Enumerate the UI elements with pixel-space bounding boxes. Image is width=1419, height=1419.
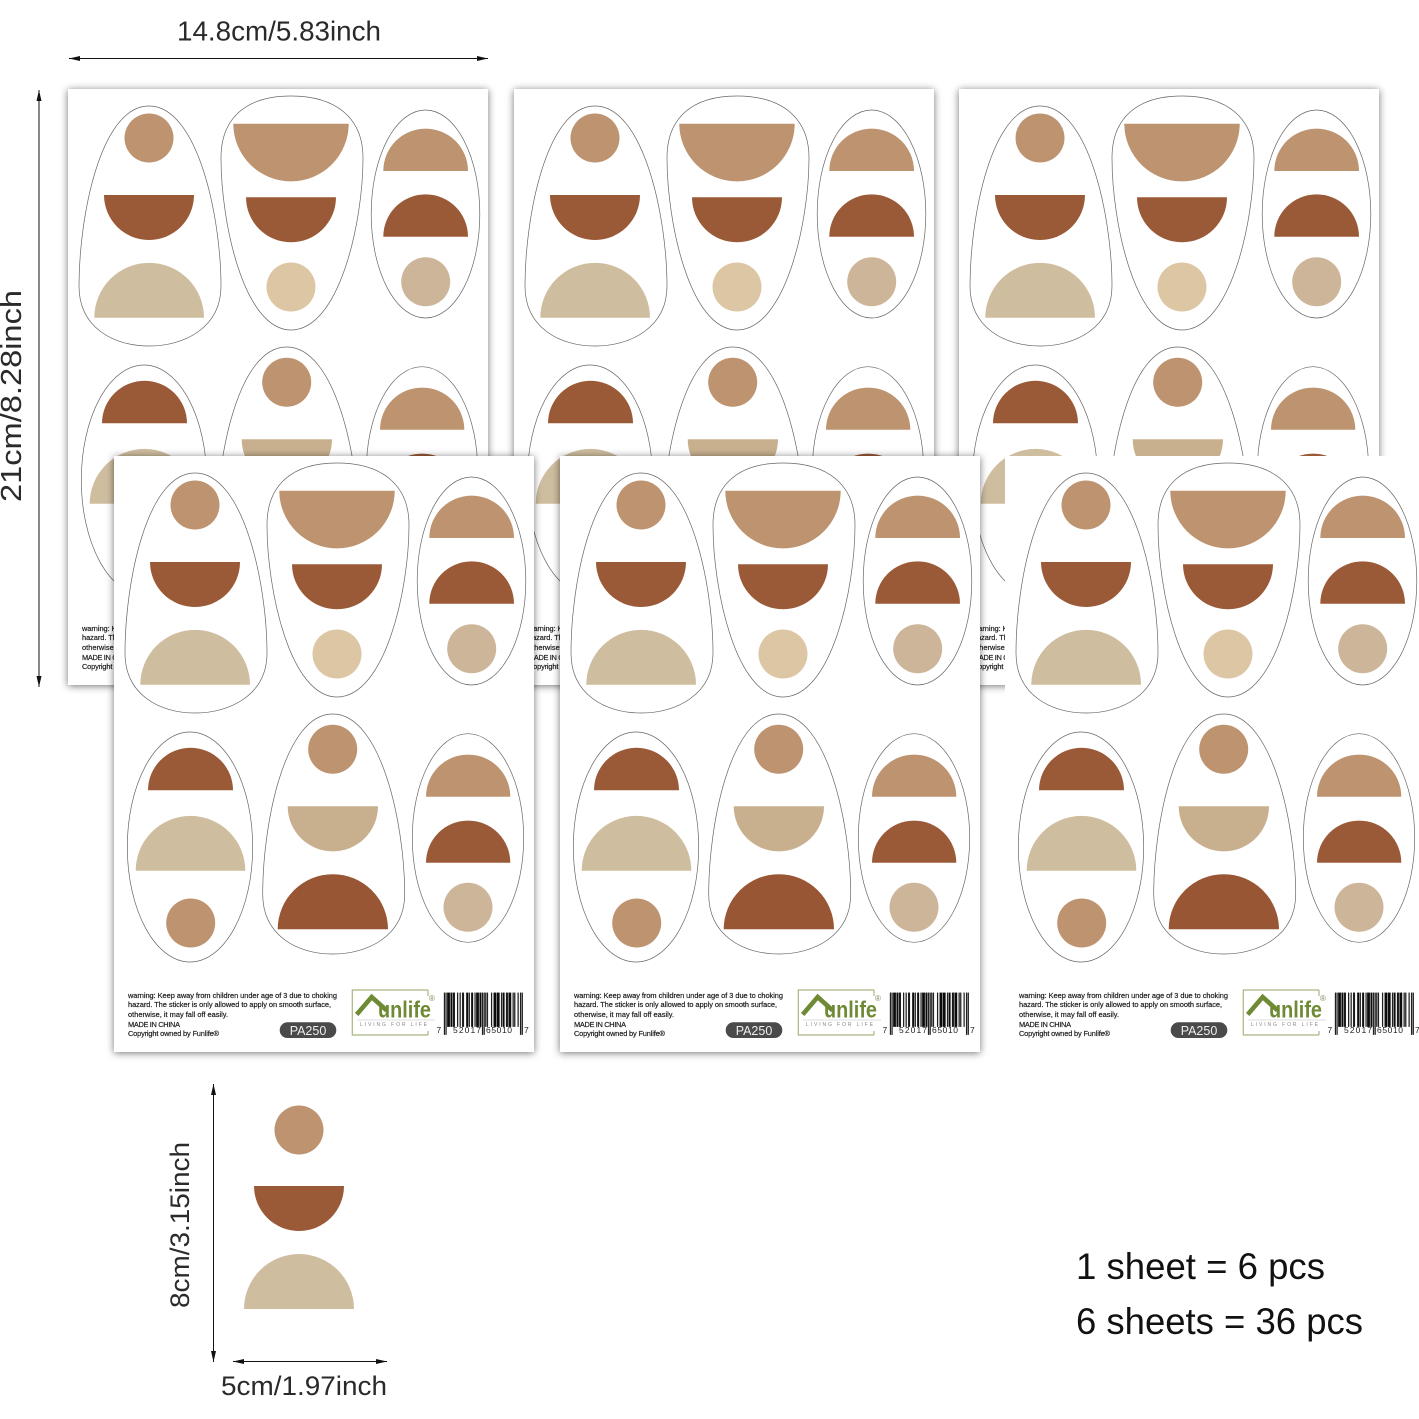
logo: Funlife: ®	[1320, 994, 1326, 1003]
product code pill	[280, 1022, 336, 1038]
logo: Funlife: LIVING FOR LIFE	[360, 1022, 428, 1028]
warning text: MADE IN CHINA	[973, 653, 1025, 662]
sheet: back row left	[68, 89, 488, 685]
arrow: sticker width	[233, 1360, 387, 1362]
warning text: MADE IN CHINA	[128, 1020, 180, 1029]
logo: Funlife	[1243, 990, 1326, 1035]
warning text: otherwise, it may fall off easily.	[574, 1010, 674, 1019]
warning text: MADE IN CHINA	[528, 653, 580, 662]
warning text	[127, 991, 337, 1038]
label: sticker height: 8cm/3.15inch	[165, 1142, 195, 1308]
warning text: otherwise, it may fall off easily.	[1019, 1010, 1119, 1019]
warning text: otherwise, it may fall off easily.	[82, 643, 182, 652]
sheet: front row right	[1005, 456, 1419, 1052]
warning text	[81, 624, 291, 671]
barcode: 7	[524, 1025, 529, 1035]
warning text: Copyright owned by Funlife®	[528, 662, 620, 671]
quantity note	[1076, 1246, 1363, 1342]
warning text: warning: Keep away from children under age of 3 due to choking	[81, 624, 291, 633]
warning text: hazard. The sticker is only allowed to apply on smooth surface,	[528, 633, 731, 642]
barcode: 65010	[486, 1025, 512, 1035]
sheet: front row middle	[560, 456, 980, 1052]
quantity note: 6 sheets = 36 pcs	[1076, 1301, 1363, 1342]
barcode	[1328, 993, 1419, 1035]
warning text: hazard. The sticker is only allowed to apply on smooth surface,	[574, 1000, 777, 1009]
warning text: Copyright owned by Funlife®	[1019, 1029, 1111, 1038]
warning text: hazard. The sticker is only allowed to apply on smooth surface,	[973, 633, 1176, 642]
warning text: otherwise, it may fall off easily.	[528, 643, 628, 652]
product code pill: PA250	[1181, 1024, 1217, 1038]
warning text: MADE IN CHINA	[1019, 1020, 1071, 1029]
sticker: half circle dome	[244, 1254, 354, 1309]
logo: Funlife: unlife	[824, 997, 877, 1023]
warning text: Copyright owned by Funlife®	[973, 662, 1065, 671]
warning text: otherwise, it may fall off easily.	[128, 1010, 228, 1019]
product code pill: PA250	[736, 1024, 772, 1038]
barcode	[882, 993, 975, 1035]
warning text	[573, 991, 783, 1038]
warning text	[972, 624, 1182, 671]
warning text: hazard. The sticker is only allowed to apply on smooth surface,	[1019, 1000, 1222, 1009]
logo: Funlife: ®	[875, 994, 881, 1003]
warning text: warning: Keep away from children under age of 3 due to choking	[527, 624, 737, 633]
logo: Funlife: ®	[429, 994, 435, 1003]
warning text	[1018, 991, 1228, 1038]
warning text: Copyright owned by Funlife®	[574, 1029, 666, 1038]
warning text: otherwise, it may fall off easily.	[973, 643, 1073, 652]
barcode: 52017	[899, 1025, 927, 1035]
barcode: 65010	[932, 1025, 958, 1035]
product code pill	[1171, 1022, 1227, 1038]
warning text: warning: Keep away from children under age of 3 due to choking	[972, 624, 1182, 633]
product code pill	[726, 1022, 782, 1038]
barcode: 7	[1328, 1025, 1332, 1035]
product code pill: PA250	[290, 1024, 326, 1038]
logo: Funlife: unlife	[378, 997, 431, 1023]
warning text: hazard. The sticker is only allowed to apply on smooth surface,	[82, 633, 285, 642]
logo: Funlife: unlife	[1269, 997, 1322, 1023]
single sticker set	[244, 1106, 354, 1309]
warning text: hazard. The sticker is only allowed to apply on smooth surface,	[128, 1000, 331, 1009]
barcode	[436, 993, 529, 1035]
sheet: front row left	[114, 456, 534, 1052]
logo: Funlife	[798, 990, 881, 1035]
warning text: Copyright owned by Funlife®	[82, 662, 174, 671]
warning text: warning: Keep away from children under age of 3 due to choking	[127, 991, 337, 1000]
warning text: warning: Keep away from children under age of 3 due to choking	[573, 991, 783, 1000]
barcode: 7	[436, 1025, 442, 1035]
quantity note: 1 sheet = 6 pcs	[1076, 1246, 1325, 1287]
logo: Funlife	[352, 990, 435, 1035]
warning text: warning: Keep away from children under age of 3 due to choking	[1018, 991, 1228, 1000]
label: sheet width: 14.8cm/5.83inch	[177, 16, 381, 46]
sticker: circle	[274, 1106, 324, 1154]
logo: Funlife: LIVING FOR LIFE	[806, 1022, 874, 1028]
warning text: Copyright owned by Funlife®	[128, 1029, 220, 1038]
sheet: back row middle	[514, 89, 934, 685]
warning text	[527, 624, 737, 671]
sheet: back row right	[959, 89, 1379, 685]
arrow: sheet height	[38, 90, 40, 687]
label: sticker width: 5cm/1.97inch	[221, 1371, 387, 1401]
arrow: sheet width	[69, 58, 488, 60]
warning text: MADE IN CHINA	[82, 653, 134, 662]
barcode: 7	[970, 1025, 975, 1035]
arrow: sticker height	[212, 1084, 214, 1362]
sticker: half circle bowl	[254, 1186, 344, 1231]
barcode: 52017	[453, 1025, 481, 1035]
logo: Funlife: LIVING FOR LIFE	[1251, 1022, 1319, 1028]
barcode: 65010	[1377, 1025, 1403, 1035]
warning text: MADE IN CHINA	[574, 1020, 626, 1029]
barcode: 52017	[1344, 1025, 1372, 1035]
barcode: 7	[882, 1025, 888, 1035]
